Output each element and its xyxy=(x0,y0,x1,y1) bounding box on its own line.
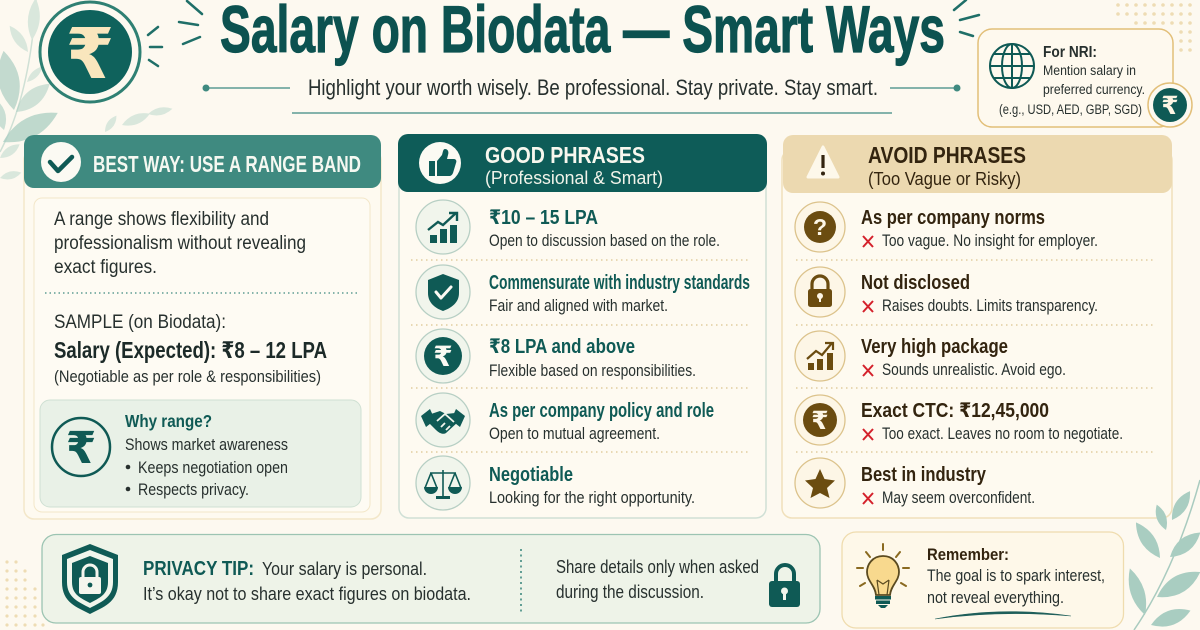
decoration: bottom-left dots xyxy=(5,560,45,627)
callout: why range: Respects privacy. xyxy=(138,481,249,499)
decoration: top-left leaves xyxy=(0,0,173,182)
text block: range explanation: A range shows flexibility and xyxy=(54,209,269,230)
row: not disclosed: Not disclosed xyxy=(861,272,970,294)
row: 8 LPA and above: Flexible based on responsibilities. xyxy=(489,362,696,380)
subtitle rules xyxy=(202,84,960,113)
text block: privacy tip: Your salary is personal. xyxy=(262,559,427,579)
text block: remember xyxy=(927,545,1105,607)
callout: for NRI: Mention salary in xyxy=(1043,63,1136,78)
row: exact CTC: Exact CTC: ₹12,45,000 xyxy=(861,400,1049,422)
row: best in industry: May seem overconfident. xyxy=(882,489,1035,507)
row: 8 LPA and above: ₹8 LPA and above xyxy=(489,336,635,358)
row: very high package: Very high package xyxy=(861,336,1008,358)
row: company norms xyxy=(795,202,1098,252)
text block: range explanation xyxy=(54,209,306,278)
callout: why range: Why range? xyxy=(125,411,212,431)
icon: shield with lock xyxy=(62,544,118,614)
panel header: best way: BEST WAY: USE A RANGE BAND xyxy=(93,151,361,177)
icon: rupee outline xyxy=(52,418,110,476)
decoration: bottom-right leaves xyxy=(1123,480,1200,630)
panel header: good phrases: GOOD PHRASES xyxy=(485,142,645,168)
row: best in industry: Best in industry xyxy=(861,464,987,486)
text block: privacy tip xyxy=(143,558,471,604)
text block: sample on biodata: (Negotiable as per role & responsibilities) xyxy=(54,368,321,386)
text block: remember: Remember: xyxy=(927,545,1009,564)
icon: rupee badge xyxy=(1148,83,1192,127)
callout: for NRI xyxy=(978,29,1192,127)
icon: rupee badge: ₹ xyxy=(1161,92,1179,120)
panel header: avoid phrases: AVOID PHRASES xyxy=(868,142,1026,168)
panel header: avoid phrases xyxy=(783,135,1172,193)
panel: remember xyxy=(842,532,1124,628)
row: best in industry xyxy=(795,458,1035,508)
text block: sample on biodata: Salary (Expected): ₹8 – 12 LPA xyxy=(54,337,327,363)
row: company norms: As per company norms xyxy=(861,207,1045,229)
panel: privacy tip xyxy=(42,534,820,623)
row: 8 LPA and above xyxy=(416,329,696,383)
text block: range explanation: exact figures. xyxy=(54,257,157,278)
panel header: good phrases: (Professional & Smart) xyxy=(485,168,663,188)
row: 10 to 15 LPA: ₹10 – 15 LPA xyxy=(489,207,598,229)
row: 10 to 15 LPA: Open to discussion based on the role. xyxy=(489,232,720,250)
row: 8 LPA and above: ₹ xyxy=(433,341,453,372)
row: company policy xyxy=(416,393,714,447)
callout: for NRI: For NRI: xyxy=(1043,44,1097,61)
row: 10 to 15 LPA xyxy=(416,200,720,254)
row: not disclosed xyxy=(795,267,1098,317)
row: industry standards: Fair and aligned with market. xyxy=(489,297,668,315)
text block: remember: The goal is to spark interest, xyxy=(927,566,1105,585)
text block: privacy tip: It’s okay not to share exact figures on biodata. xyxy=(143,584,471,604)
icon: rupee medallion xyxy=(40,2,140,102)
panel header: good phrases xyxy=(398,134,767,192)
icon: padlock xyxy=(769,565,800,607)
icon: rupee medallion: ₹ xyxy=(66,15,114,93)
row: very high package: Sounds unrealistic. Avoid ego. xyxy=(882,361,1066,379)
row: company policy: As per company policy and role xyxy=(489,400,714,422)
icon: title rays right xyxy=(954,0,979,36)
decoration: top-right dots xyxy=(1116,3,1192,52)
callout: why range: Keeps negotiation open xyxy=(138,459,288,477)
text block: sample on biodata: SAMPLE (on Biodata): xyxy=(54,312,226,333)
panel: best way xyxy=(24,135,381,519)
icon: rays around medallion xyxy=(148,1,202,66)
callout: why range: Shows market awareness xyxy=(125,436,288,454)
row: negotiable xyxy=(416,456,695,510)
icon: rupee outline: ₹ xyxy=(66,424,96,473)
row: exact CTC: Too exact. Leaves no room to negotiate. xyxy=(882,425,1123,443)
row: company norms: ? xyxy=(813,214,827,240)
callout: why range xyxy=(40,400,361,507)
panel: avoid phrases xyxy=(782,135,1172,518)
row: very high package xyxy=(795,331,1066,381)
text block: range explanation: professionalism without revealing xyxy=(54,233,306,254)
panel header: best way xyxy=(24,135,381,188)
text block: share details: during the discussion. xyxy=(556,582,704,602)
panel: good phrases xyxy=(398,134,767,518)
icon: globe xyxy=(990,44,1034,88)
text block: share details: Share details only when asked xyxy=(556,557,759,577)
panel header: avoid phrases: (Too Vague or Risky) xyxy=(868,169,1021,189)
text block: privacy tip: PRIVACY TIP: xyxy=(143,558,254,580)
text block: share details xyxy=(556,557,759,602)
icon: light bulb xyxy=(857,544,909,608)
row: industry standards: Commensurate with industry standards xyxy=(489,272,750,294)
text block: remember: not reveal everything. xyxy=(927,588,1064,607)
callout: for NRI: preferred currency. xyxy=(1043,82,1145,97)
row: company norms: Too vague. No insight for employer. xyxy=(882,232,1098,250)
row: not disclosed: Raises doubts. Limits transparency. xyxy=(882,297,1098,315)
row: negotiable: Negotiable xyxy=(489,464,573,486)
row: exact CTC xyxy=(795,395,1123,445)
row: negotiable: Looking for the right opportunity. xyxy=(489,489,695,507)
text block: sample on biodata xyxy=(54,312,327,386)
row: industry standards xyxy=(416,265,750,319)
subtitle: Highlight your worth wisely. Be professional. Stay private. Stay smart. xyxy=(308,75,878,100)
row: exact CTC: ₹ xyxy=(811,407,829,435)
callout: for NRI: (e.g., USD, AED, GBP, SGD) xyxy=(999,102,1142,117)
row: company policy: Open to mutual agreement. xyxy=(489,425,660,443)
